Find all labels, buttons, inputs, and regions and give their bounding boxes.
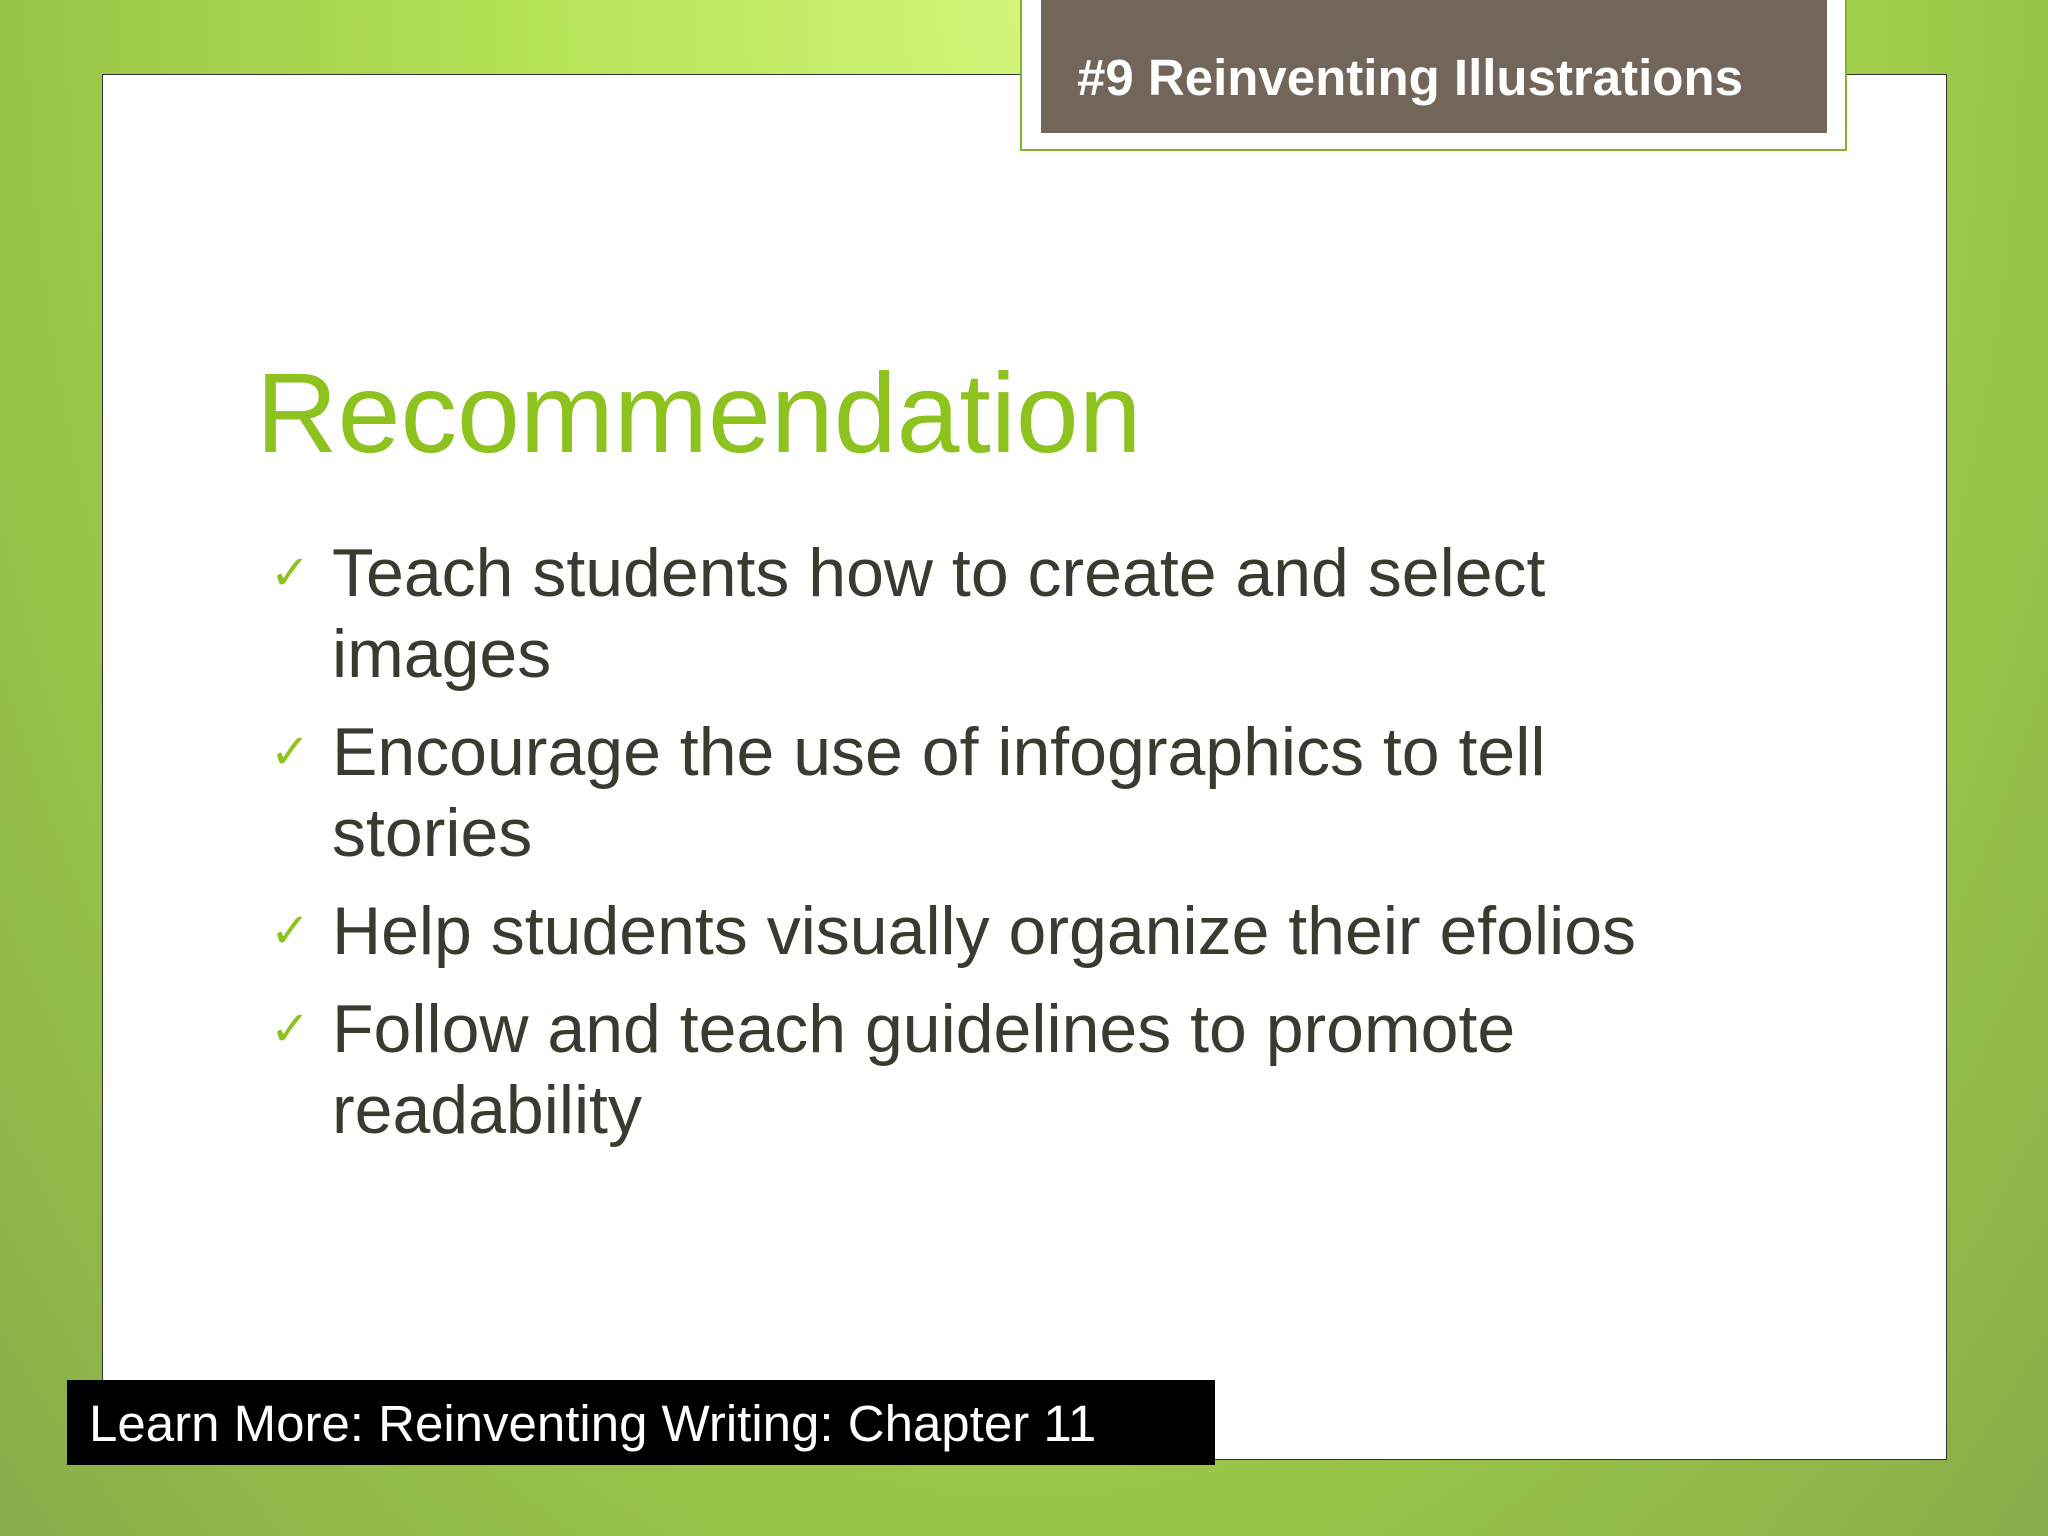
bullet list <box>270 535 1636 1148</box>
bullet 3: ✓ <box>270 905 310 958</box>
bullet 1: ✓ <box>270 547 310 600</box>
bullet 2: ✓ <box>270 726 310 779</box>
title tab text <box>1041 0 1827 133</box>
bullet 4: ✓ <box>270 1003 310 1056</box>
bullet 1: Teach students how to create and select images <box>332 535 1545 692</box>
title tab <box>1020 0 1847 151</box>
title tab text: #9 Reinventing Illustrations <box>1077 49 1743 106</box>
footer bar: Learn More: Reinventing Writing: Chapter 11 <box>89 1395 1096 1452</box>
heading: Recommendation <box>256 350 1142 476</box>
footer bar <box>67 1380 1215 1465</box>
bullet 2: Encourage the use of infographics to tell stories <box>332 714 1545 871</box>
bullet 3: Help students visually organize their efolios <box>332 893 1636 969</box>
bullet 4: Follow and teach guidelines to promote readability <box>332 991 1515 1148</box>
